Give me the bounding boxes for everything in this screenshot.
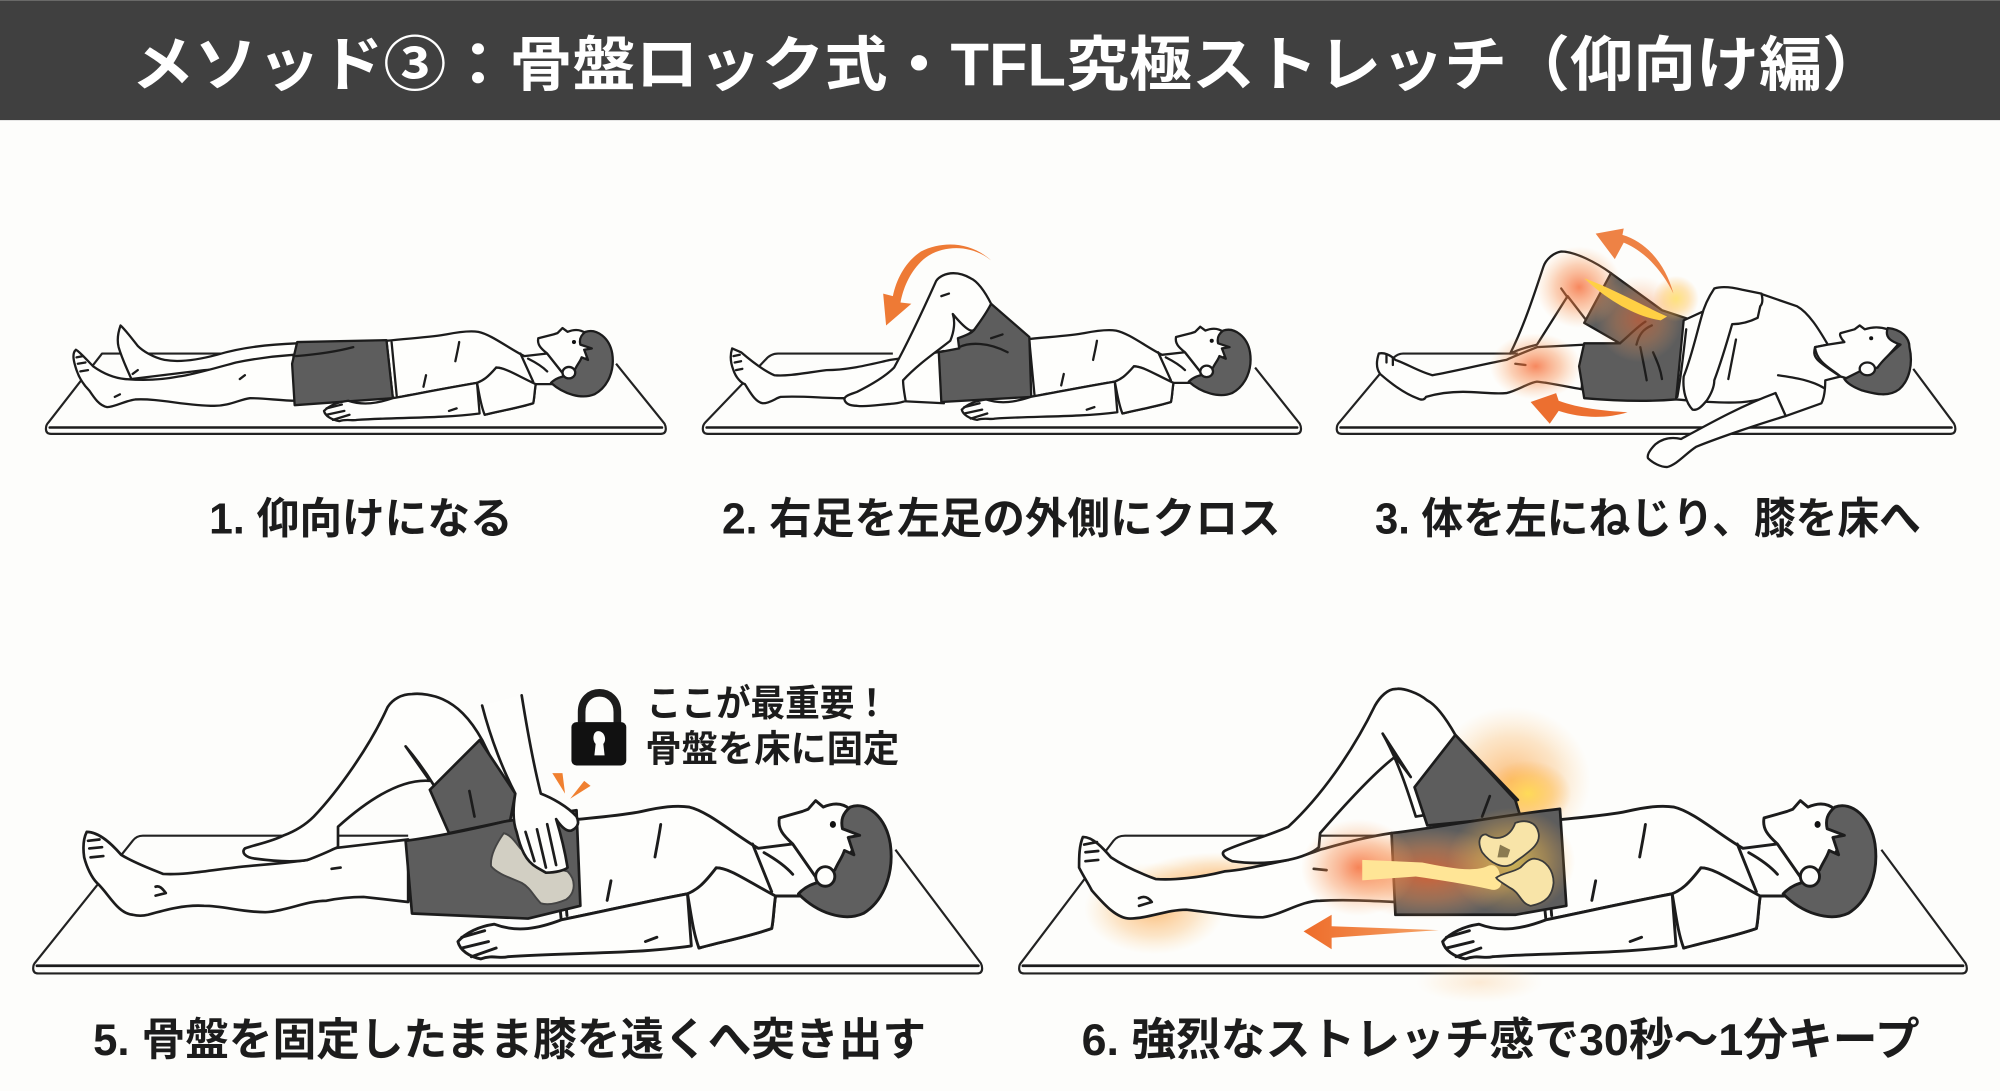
exercise mat: [703, 354, 1301, 434]
title: メソッド③：骨盤ロック式・TFL究極ストレッチ（仰向け編）: [131, 32, 1885, 99]
caption: step 1: 1. 仰向けになる: [209, 495, 513, 543]
outstretched arm: [1443, 868, 1760, 959]
heat glow on hip and knee: [1490, 246, 1699, 399]
caption: step 6: 6. 強烈なストレッチ感で30秒～1分キープ: [1082, 1016, 1920, 1065]
figure in full stretch: [1079, 689, 1876, 948]
arrow: leg crossing over: [883, 245, 991, 325]
arrow: knee going to floor: [1531, 393, 1628, 424]
figure with pressing hand: [83, 694, 891, 959]
figure twisted: [1377, 251, 1911, 467]
pressing arm and hand: [482, 695, 578, 873]
torso and head: [1676, 294, 1911, 416]
panel: step 3 twist body: [1337, 229, 1955, 467]
panel: step 1 lying on back: [46, 325, 666, 434]
outstretched arm: [1648, 393, 1786, 467]
femur and pelvis bones: [1362, 821, 1554, 906]
panel: step 6 hold strong stretch: [1019, 689, 1967, 1003]
callout text: ここが最重要！: [647, 683, 889, 724]
bent arm on chest: [1683, 287, 1762, 410]
exercise mat: [1337, 354, 1955, 434]
glow behind legs and hip: [1084, 707, 1591, 1003]
callout text: 骨盤を床に固定: [645, 729, 899, 770]
figure lying flat: [73, 325, 613, 421]
caption: step 3: 3. 体を左にねじり、膝を床へ: [1375, 495, 1921, 543]
caption: step 2: 2. 右足を左足の外側にクロス: [722, 495, 1281, 543]
arrow: knee going up: [1596, 229, 1673, 294]
callout text: [645, 683, 899, 770]
exercise mat: [33, 836, 982, 973]
orange impact marks: [552, 773, 591, 799]
panel: step 2 cross right foot: [703, 245, 1301, 434]
figure with crossed leg: [731, 273, 1251, 420]
arrow: push knee away: [1304, 915, 1439, 949]
panel: step 5 lock pelvis: [33, 683, 982, 973]
exercise mat: [46, 354, 666, 434]
glow over hip: [1301, 808, 1575, 920]
pelvis bone: [491, 833, 574, 904]
title bar: [0, 0, 2000, 120]
caption: step 5: 5. 骨盤を固定したまま膝を遠くへ突き出す: [93, 1016, 926, 1065]
lock icon: [571, 693, 626, 766]
exercise mat: [1019, 836, 1967, 973]
